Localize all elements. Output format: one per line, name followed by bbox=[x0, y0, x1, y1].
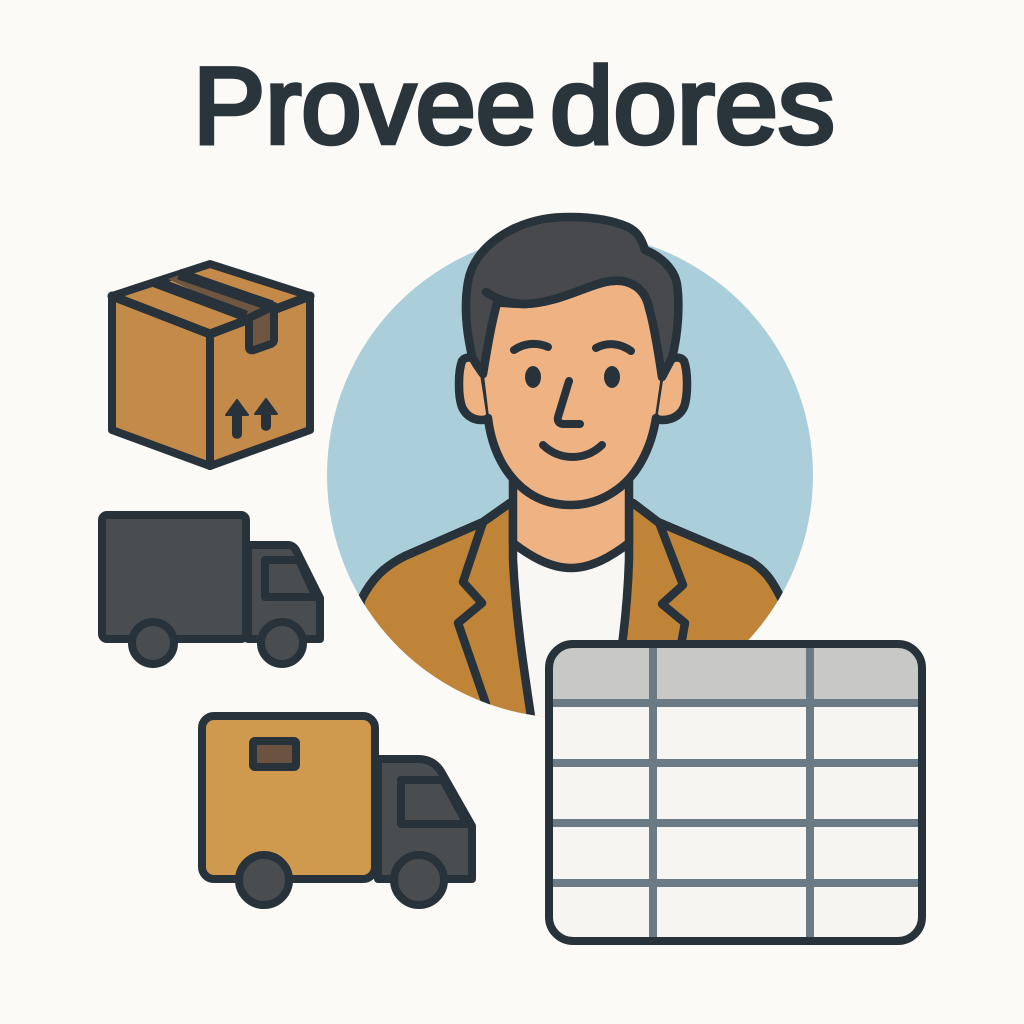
mouth bbox=[543, 445, 602, 457]
tape band bbox=[168, 272, 272, 316]
title: dores bbox=[550, 45, 835, 167]
icon: up arrows bbox=[226, 399, 277, 438]
face bbox=[484, 270, 661, 505]
ears bbox=[459, 358, 491, 420]
icon: supplier person in circle bbox=[327, 217, 813, 760]
nose bbox=[558, 381, 580, 424]
title: Provee bbox=[193, 45, 536, 167]
table header bbox=[550, 645, 921, 699]
spreadsheet table bbox=[549, 644, 922, 941]
icon: orange delivery truck bbox=[202, 716, 472, 905]
jaw line bbox=[488, 418, 656, 505]
neck bbox=[513, 470, 629, 568]
label bbox=[253, 741, 296, 767]
right eye bbox=[604, 366, 620, 388]
title bbox=[193, 45, 835, 167]
wheels bbox=[239, 855, 289, 905]
icon: cardboard box bbox=[112, 264, 310, 466]
jacket and shirt bbox=[358, 498, 783, 717]
left eyebrow bbox=[514, 344, 548, 350]
tape fold bbox=[249, 306, 274, 350]
left eye bbox=[525, 366, 541, 388]
icon: dark delivery truck bbox=[102, 515, 320, 664]
wheels bbox=[132, 622, 174, 664]
right eyebrow bbox=[596, 344, 631, 351]
background circle bbox=[327, 232, 813, 718]
grid lines bbox=[549, 645, 922, 941]
fringe line bbox=[486, 281, 649, 308]
table frame bbox=[549, 644, 922, 941]
hair bbox=[466, 217, 678, 377]
